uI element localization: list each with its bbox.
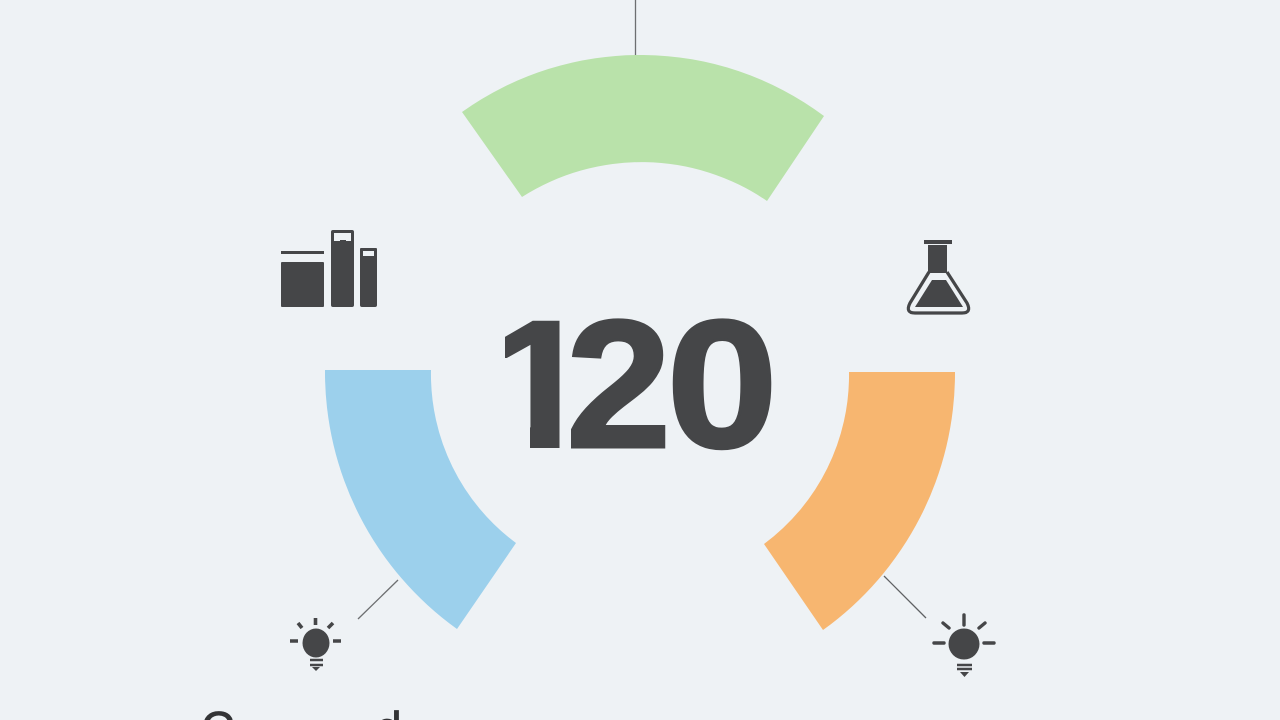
arc segment: orange: [764, 372, 955, 630]
connector line: orange to bulb: [884, 576, 926, 618]
center number: 0: [666, 282, 778, 486]
cropped bottom text: [201, 702, 402, 720]
center number: 1: [484, 282, 597, 486]
center number: [505, 318, 772, 450]
arc segment: green: [462, 55, 824, 201]
connector line: blue to bulb: [358, 580, 398, 619]
icon: flask: [908, 240, 969, 313]
connector line: top: [634, 0, 636, 56]
icon: books: [281, 230, 377, 307]
icon: light bulb right: [934, 615, 994, 677]
icon: light bulb left: [290, 618, 341, 671]
center number: 2: [566, 283, 671, 486]
arc segment: blue: [325, 370, 516, 629]
